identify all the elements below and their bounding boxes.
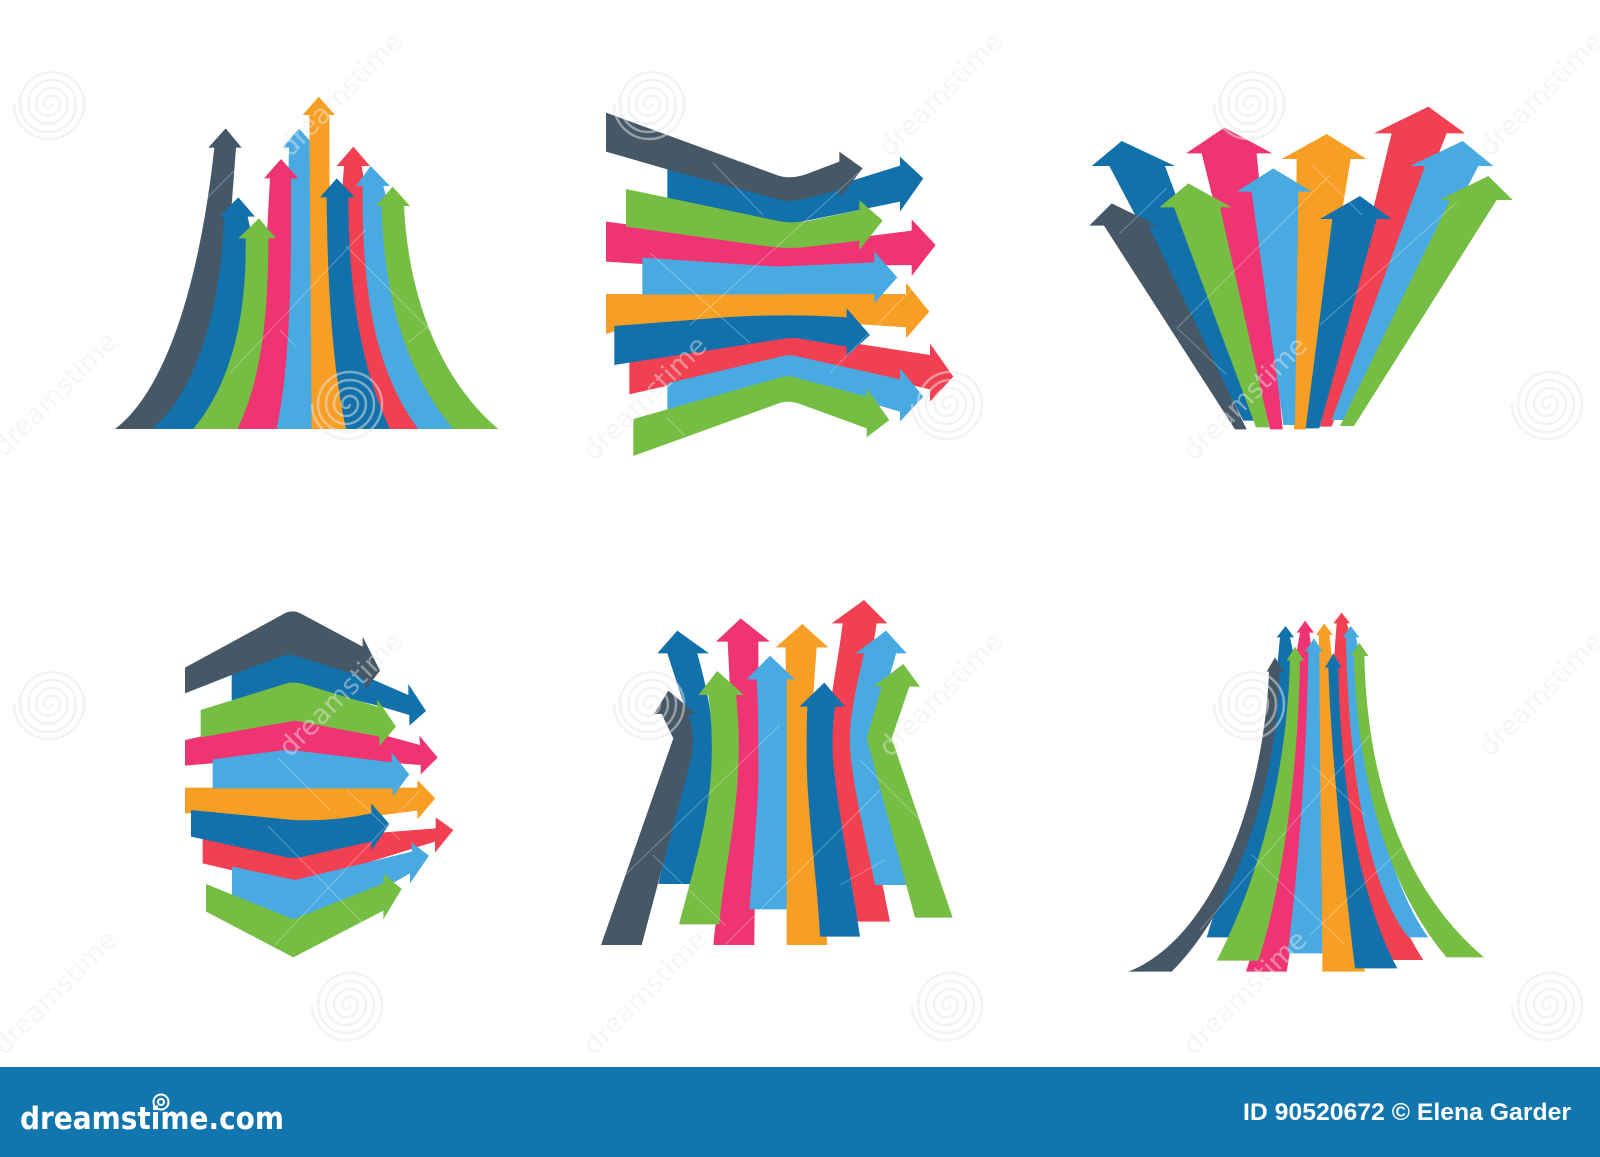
arrow: dark slate bbox=[606, 113, 863, 201]
watermark: spirals and diagonal text: dreamstime bbox=[273, 626, 410, 763]
arrow: red bbox=[827, 600, 890, 922]
arrow: red bbox=[629, 333, 953, 402]
arrow: green right bbox=[1351, 643, 1484, 957]
arrow: orange bbox=[1316, 623, 1365, 972]
logo spiral icon bbox=[154, 1094, 168, 1110]
arrow: dark slate bbox=[601, 691, 696, 945]
arrow: sky blue lower bbox=[232, 843, 429, 923]
arrow: sky blue bbox=[642, 252, 897, 303]
arrow: blue lower bbox=[614, 308, 870, 365]
arrow: blue bbox=[1092, 141, 1260, 421]
arrow: sky blue right bbox=[850, 631, 907, 885]
arrow: sky blue lower bbox=[667, 355, 923, 422]
footer logo text: dreamstime.com bbox=[20, 1101, 284, 1137]
arrow: blue bbox=[152, 197, 255, 429]
arrow: blue right bbox=[1306, 196, 1392, 428]
arrow: red bbox=[1333, 613, 1423, 960]
watermark: spirals and diagonal text: dreamstime bbox=[873, 626, 1010, 763]
arrow: sky blue bbox=[1237, 168, 1312, 425]
panel: straight arrows fanning out upward bbox=[1089, 107, 1513, 429]
arrow: pink bbox=[1246, 621, 1314, 972]
arrow: pink bbox=[1186, 128, 1283, 429]
arrow: sky blue right bbox=[356, 166, 460, 429]
arrow: blue right bbox=[320, 178, 390, 429]
arrow: orange bbox=[185, 780, 435, 824]
panel: wavy arrows rising upward bbox=[601, 600, 953, 945]
arrow: orange bbox=[776, 624, 828, 945]
arrow: dark slate bbox=[1089, 203, 1247, 429]
panel: arrows pointing right converging bbox=[606, 113, 953, 456]
watermark: spirals and diagonal text: dreamstime bbox=[873, 26, 1010, 163]
arrow: pink bbox=[606, 219, 936, 276]
arrow: green right bbox=[1340, 176, 1513, 426]
arrow: green bbox=[679, 671, 744, 924]
arrow: green bbox=[1159, 183, 1269, 427]
arrow: dark slate bbox=[185, 611, 380, 693]
arrow: blue left bbox=[1207, 626, 1295, 937]
arrow: green bbox=[193, 218, 276, 429]
watermark: spirals and diagonal text: dreamstime bbox=[1177, 330, 1314, 467]
arrow: dark slate bbox=[1128, 657, 1284, 972]
arrow: blue top bbox=[232, 651, 426, 726]
arrow: green lower bbox=[633, 376, 889, 456]
footer bar bbox=[0, 1067, 1600, 1157]
watermark: spirals and diagonal text: dreamstime bbox=[1177, 924, 1314, 1061]
arrow: pink bbox=[231, 159, 298, 429]
arrow: blue centre bbox=[799, 683, 860, 937]
arrow: dark slate bbox=[115, 128, 242, 429]
arrow: blue top bbox=[667, 157, 923, 225]
panel: arrows forming a shield shape bbox=[185, 611, 453, 957]
arrow: green right bbox=[867, 664, 953, 918]
arrow: green lower bbox=[206, 874, 402, 957]
arrow: blue lower bbox=[191, 803, 389, 858]
arrow: sky blue bbox=[747, 656, 795, 909]
watermark: spirals and diagonal text: dreamstime bbox=[577, 924, 714, 1061]
arrow: orange bbox=[303, 97, 346, 429]
arrow: green right bbox=[376, 187, 498, 429]
watermark: spirals and diagonal text: dreamstime bbox=[577, 330, 714, 467]
arrow: blue centre bbox=[1325, 653, 1397, 968]
arrow: orange bbox=[606, 283, 929, 338]
arrow: sky blue bbox=[270, 128, 317, 429]
arrow: green bbox=[626, 189, 883, 250]
arrow: green bbox=[1217, 647, 1304, 961]
watermark: spirals and diagonal text: dreamstime bbox=[273, 26, 410, 163]
arrow: pink bbox=[185, 717, 438, 774]
arrow: red bbox=[203, 817, 453, 885]
arrow: green bbox=[201, 683, 396, 746]
arrow: orange bbox=[1282, 134, 1367, 429]
arrow: sky blue bbox=[213, 750, 409, 797]
arrow: red bbox=[337, 147, 425, 429]
arrow: blue left bbox=[657, 631, 713, 884]
arrow: sky blue right bbox=[1343, 626, 1428, 937]
image id and credit: ID 90520672 © Elena Garder bbox=[1243, 1099, 1571, 1126]
arrow: red bbox=[1320, 107, 1465, 427]
arrow: pink bbox=[713, 618, 770, 945]
panel: arrows rising from a bell curve bbox=[115, 97, 498, 429]
panel: tall narrow arrows from a wide base bbox=[1128, 613, 1484, 972]
arrow: sky blue bbox=[1288, 638, 1323, 953]
arrow: sky blue right bbox=[1332, 141, 1493, 420]
